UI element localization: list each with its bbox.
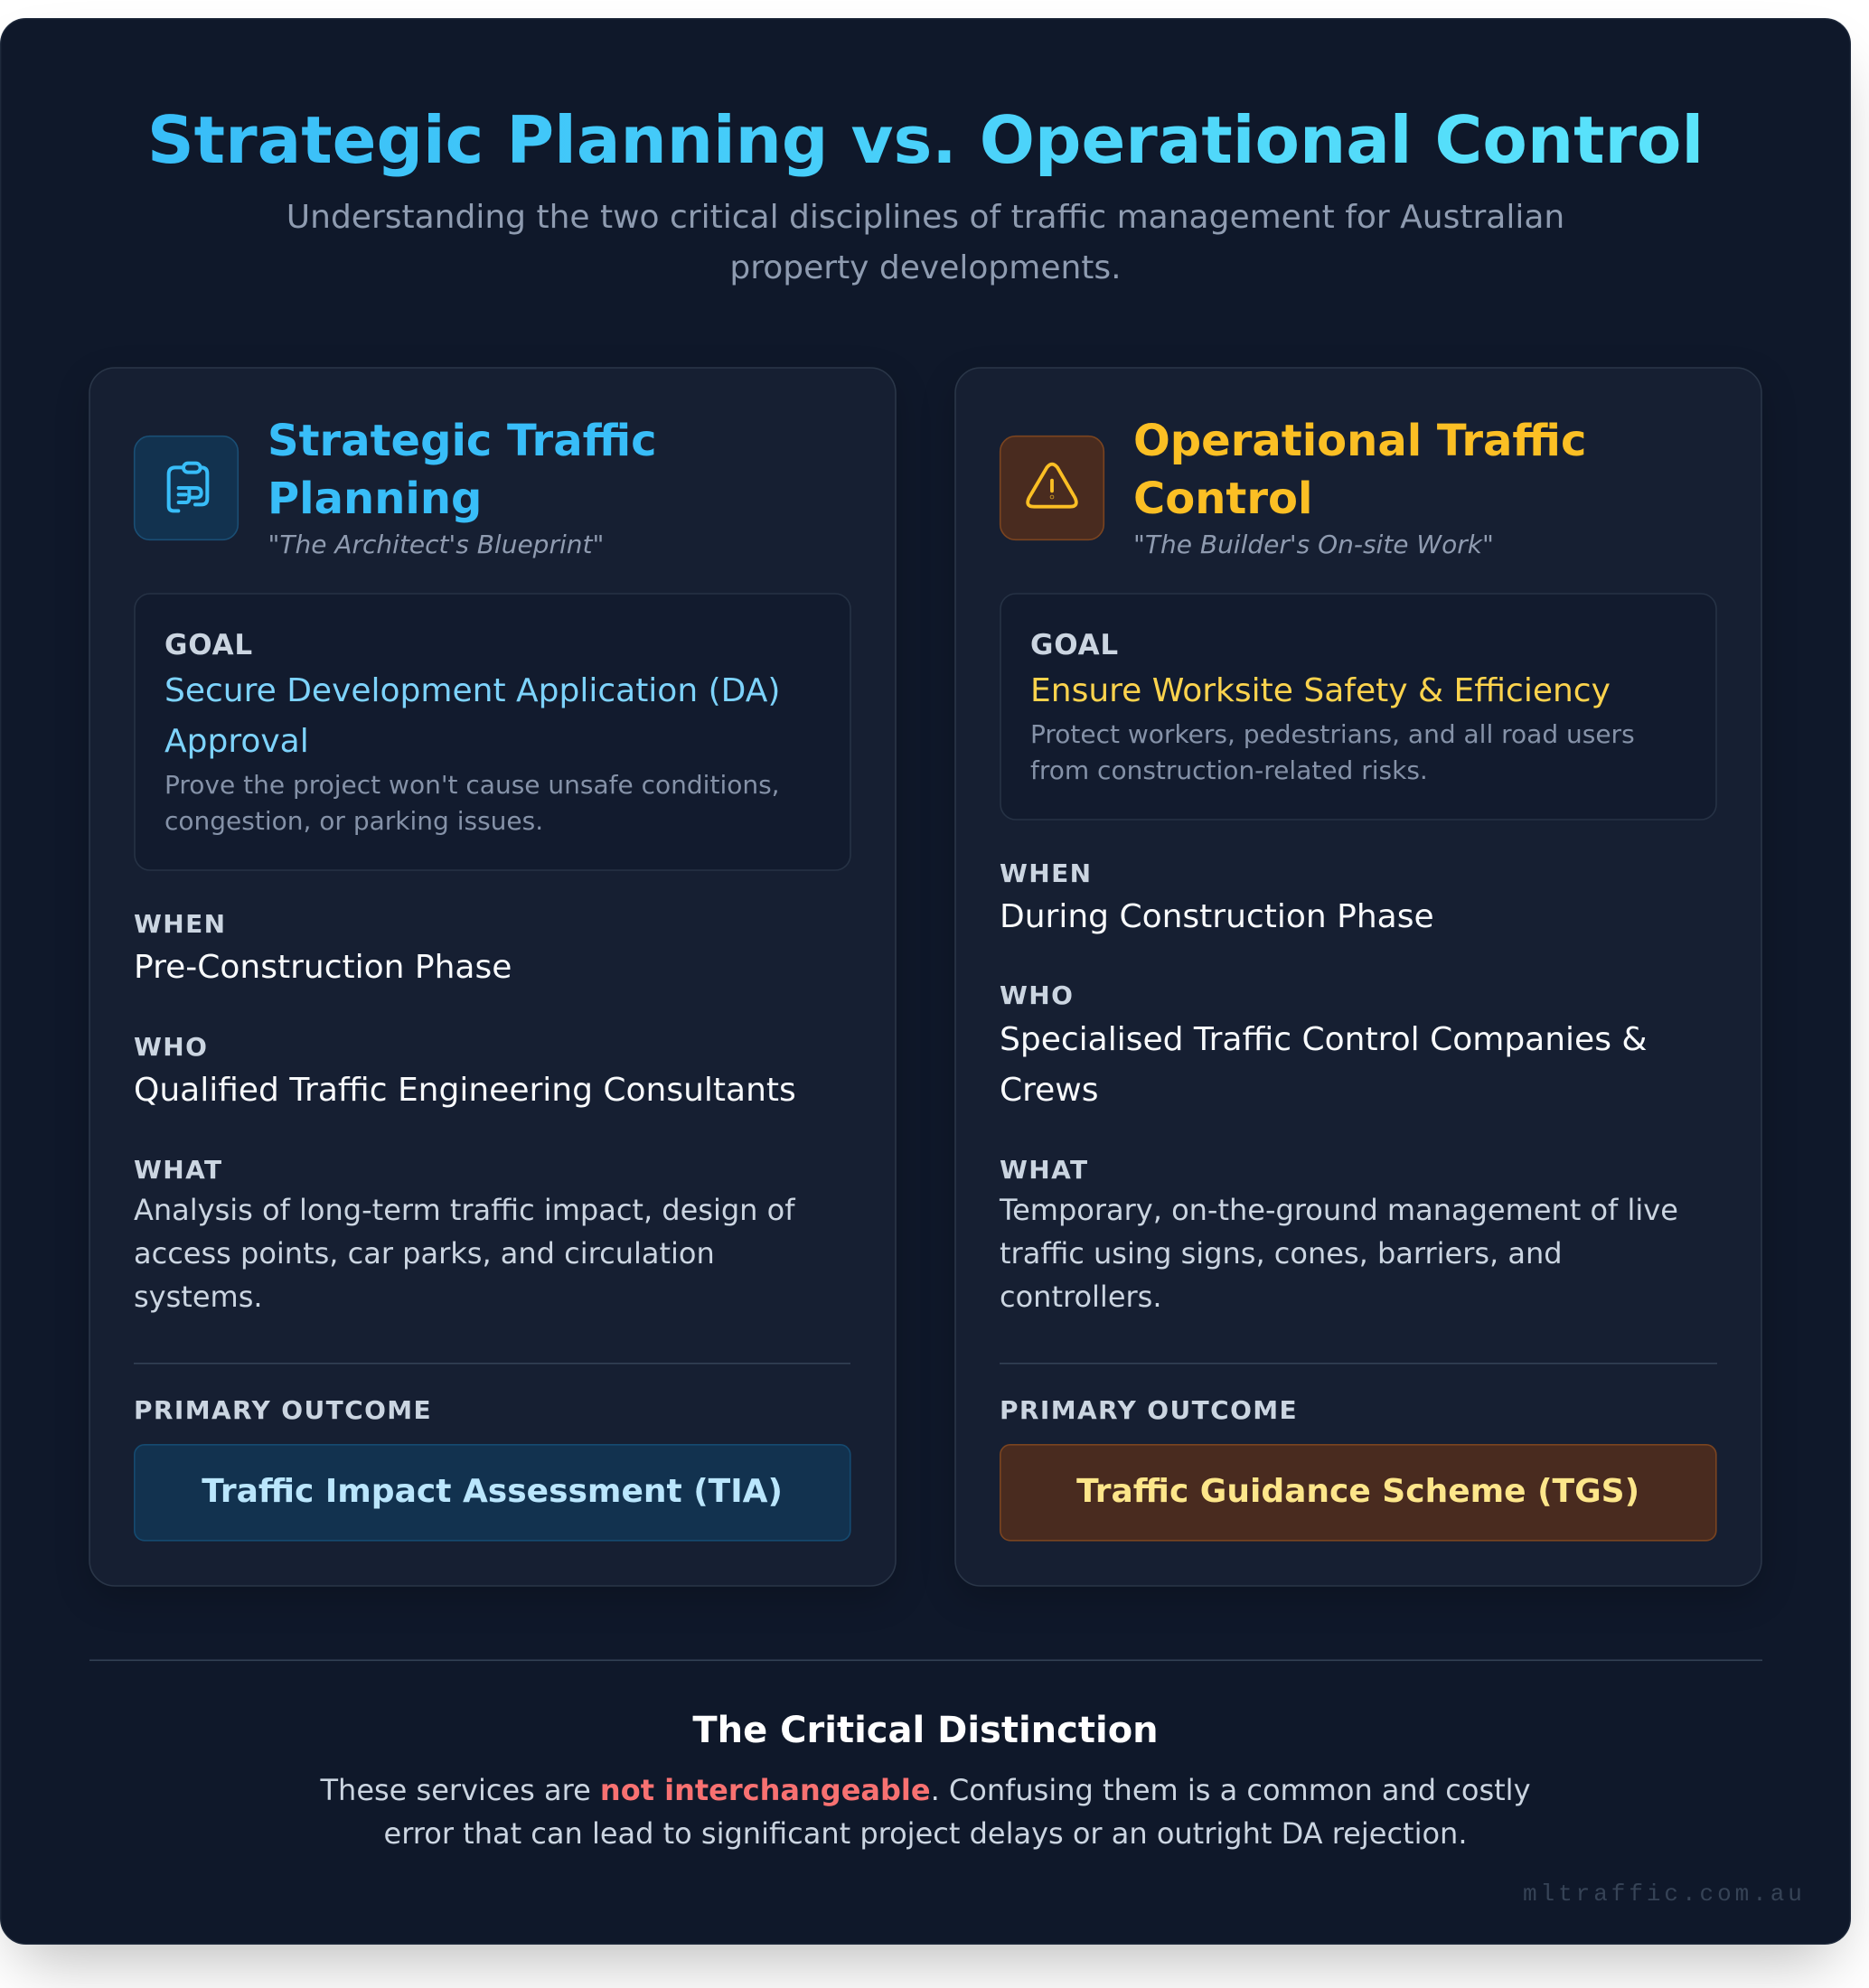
tagline: "The Builder's On-site Work" [1133, 530, 1494, 559]
goal box: GOAL [1030, 629, 1119, 661]
icon: clipboard [135, 436, 238, 539]
what: traffic using signs, cones, barriers, and [1000, 1236, 1563, 1271]
goal box: Secure Development Application (DA) [164, 672, 780, 709]
who: Crews [1000, 1072, 1099, 1109]
what: WHAT [134, 1155, 223, 1185]
subtitle: Understanding the two critical disciplines of traffic management for Australian [286, 199, 1564, 236]
panel: strategic traffic planning [89, 368, 896, 1599]
when: WHEN [1000, 858, 1092, 888]
heading: the critical distinction: The Critical Distinction [692, 1710, 1159, 1751]
critical distinction text: error that can lead to significant project delays or an outright DA rejection. [383, 1816, 1468, 1851]
heading: strategic traffic planning: Strategic Traffic [268, 416, 657, 466]
when: WHEN [134, 909, 226, 939]
critical distinction text: These services are not interchangeable. Confusing them is a common and costly [319, 1773, 1531, 1807]
title: Strategic Planning vs. Operational Control [147, 102, 1704, 178]
goal box: congestion, or parking issues. [164, 806, 543, 836]
critical distinction text [319, 1773, 1531, 1851]
who [1000, 980, 1647, 1109]
primary outcome: Traffic Guidance Scheme (TGS) [1076, 1473, 1639, 1510]
when: During Construction Phase [1000, 898, 1434, 935]
goal box: GOAL [164, 629, 253, 661]
heading: operational traffic control [1133, 416, 1586, 524]
goal box: from construction-related risks. [1030, 755, 1428, 785]
goal box [135, 594, 850, 870]
subtitle [286, 199, 1564, 286]
goal box: Prove the project won't cause unsafe conditions, [164, 770, 780, 800]
who: Qualified Traffic Engineering Consultants [134, 1072, 796, 1109]
what [999, 1155, 1678, 1314]
primary outcome: PRIMARY OUTCOME [134, 1395, 432, 1425]
what: systems. [134, 1280, 263, 1314]
who [134, 1032, 796, 1109]
heading: strategic traffic planning: Planning [268, 474, 482, 524]
primary outcome [134, 1395, 850, 1541]
heading: operational traffic control: Control [1133, 474, 1312, 524]
when [134, 909, 512, 986]
heading: operational traffic control: Operational Traffic [1133, 416, 1586, 466]
what: Analysis of long-term traffic impact, design of [134, 1193, 795, 1227]
goal box: Approval [164, 723, 309, 760]
panel: operational traffic control [955, 368, 1762, 1599]
primary outcome [1000, 1395, 1716, 1541]
goal box: Ensure Worksite Safety & Efficiency [1030, 672, 1611, 709]
icon: warning triangle [1000, 436, 1104, 539]
watermark: mltraffic.com.au [1523, 1880, 1806, 1908]
what [134, 1155, 795, 1314]
primary outcome: PRIMARY OUTCOME [1000, 1395, 1298, 1425]
primary outcome: Traffic Impact Assessment (TIA) [202, 1473, 783, 1510]
who: WHO [134, 1032, 208, 1062]
when [1000, 858, 1434, 935]
tagline: "The Architect's Blueprint" [268, 530, 604, 559]
heading: strategic traffic planning [268, 416, 657, 524]
goal box: Protect workers, pedestrians, and all road users [1030, 719, 1635, 749]
subtitle: property developments. [729, 249, 1122, 286]
who: Specialised Traffic Control Companies & [1000, 1021, 1647, 1058]
who: WHO [1000, 980, 1074, 1010]
what: controllers. [1000, 1280, 1162, 1314]
what: WHAT [1000, 1155, 1089, 1185]
what: access points, car parks, and circulation [134, 1236, 715, 1271]
goal box [1000, 594, 1716, 820]
what: Temporary, on-the-ground management of live [999, 1193, 1678, 1227]
when: Pre-Construction Phase [134, 949, 512, 986]
